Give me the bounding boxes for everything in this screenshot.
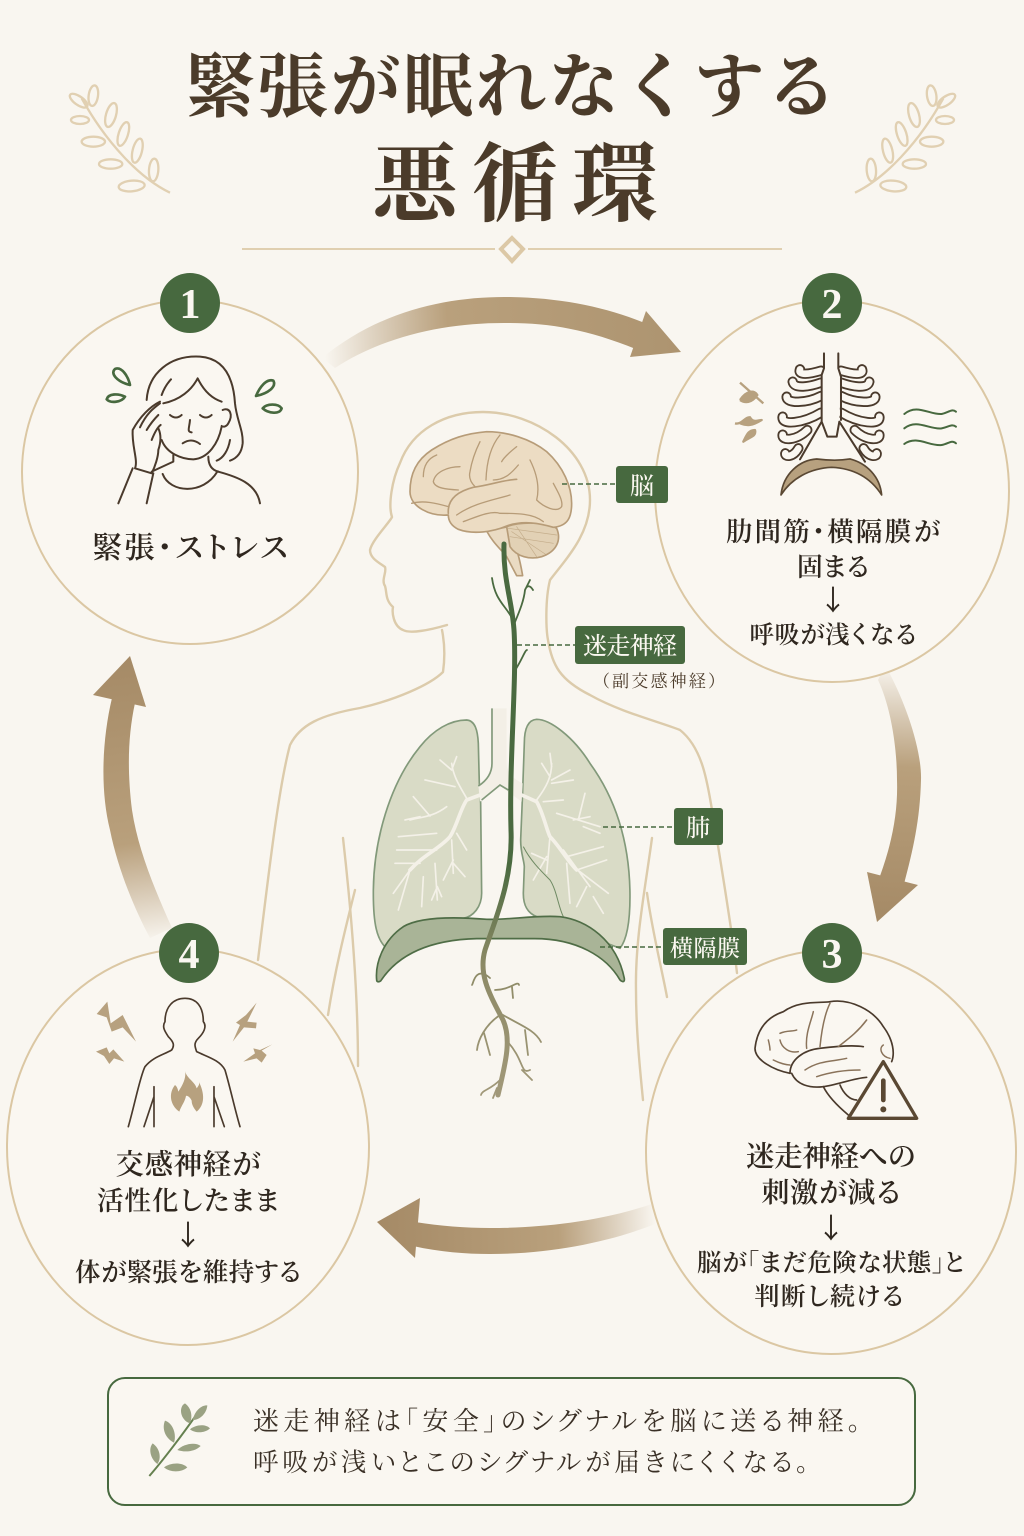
- label: brain: 脳: [630, 473, 654, 500]
- title: 悪循環: [372, 137, 658, 233]
- icon: body with fire and bolts: [96, 998, 272, 1127]
- label: brain: [562, 466, 668, 503]
- step 4 text: 交感神経が: [116, 1149, 261, 1181]
- step 3 text: ↓: [817, 1207, 845, 1247]
- step 4 text: 体が緊張を維持する: [75, 1258, 301, 1287]
- step 4 number badge: [159, 923, 219, 983]
- title: 緊張が眠れなくする: [185, 50, 837, 127]
- callout text: 呼吸が浅いとこのシグナルが届きにくくなる。: [253, 1448, 809, 1477]
- step 2 text: ↓: [819, 579, 847, 619]
- title divider with diamond: [242, 238, 782, 261]
- label: diaphragm: [600, 928, 747, 965]
- step 3 number badge: 3: [822, 932, 842, 978]
- label: vagus nerve: 迷走神経: [583, 633, 677, 660]
- step 2 number badge: [802, 273, 862, 333]
- step 4 text: ↓: [174, 1214, 202, 1254]
- step 3 text: 脳が「まだ危険な状態」と: [697, 1249, 965, 1277]
- step 2 text: 呼吸が浅くなる: [750, 621, 916, 649]
- icon: woman with headache: [107, 357, 282, 503]
- step 4 text: 活性化したまま: [97, 1186, 279, 1216]
- callout text: [253, 1407, 861, 1477]
- step 3 text: 判断し続ける: [754, 1283, 904, 1311]
- panel: step 2 stiff muscles: [655, 273, 1009, 682]
- panel: step 4 sympathetic activation: [7, 923, 369, 1345]
- body silhouette outline: [258, 412, 737, 1100]
- label: lungs: 肺: [686, 815, 710, 842]
- anatomy: vagus nerve: [472, 544, 541, 1098]
- step 2 text: 肋間筋・横隔膜が: [726, 517, 940, 547]
- step 1 text: 緊張・ストレス: [92, 532, 288, 565]
- step 3 text: 刺激が減る: [762, 1177, 900, 1209]
- arrow: step 1 to step 2: [322, 297, 681, 368]
- label: vagus nerve: [517, 626, 725, 691]
- step 2 text: [726, 517, 940, 649]
- callout text: 迷走神経は「安全」のシグナルを脳に送る神経。: [253, 1407, 861, 1436]
- trachea and bronchi: [393, 708, 608, 913]
- arrow: step 4 to step 1: [93, 656, 172, 938]
- icon: green sprig: [149, 1403, 210, 1476]
- step 1 number badge: [160, 273, 220, 333]
- step 4 number badge: 4: [178, 932, 200, 978]
- icon: brain with warning: [755, 1001, 917, 1118]
- step 3 number badge: [802, 923, 862, 983]
- step 2 number badge: 2: [822, 282, 842, 328]
- anatomy: lungs: [373, 708, 630, 982]
- step 3 text: [697, 1141, 965, 1311]
- decoration: left laurel: [68, 85, 170, 193]
- title: [185, 50, 837, 233]
- panel: step 3 reduced vagal stimulation: [646, 923, 1016, 1354]
- arrow: step 2 to step 3: [867, 665, 921, 922]
- decoration: right laurel: [855, 85, 957, 193]
- step 1 number badge: 1: [180, 282, 200, 328]
- label: lungs: [603, 808, 723, 845]
- panel: step 1 tension and stress: [22, 273, 358, 644]
- label: diaphragm: 横隔膜: [670, 936, 740, 961]
- step 3 text: 迷走神経への: [746, 1141, 916, 1173]
- label: vagus nerve: （副交感神経）: [593, 672, 725, 691]
- step 4 text: [75, 1149, 301, 1287]
- anatomy: brain: [410, 432, 572, 576]
- step 2 text: 固まる: [797, 553, 869, 582]
- callout: vagus nerve note: [108, 1378, 915, 1505]
- arrow: step 3 to step 4: [377, 1198, 655, 1258]
- icon: ribcage and diaphragm: [735, 353, 956, 495]
- panel: anatomy centre: [373, 432, 747, 1098]
